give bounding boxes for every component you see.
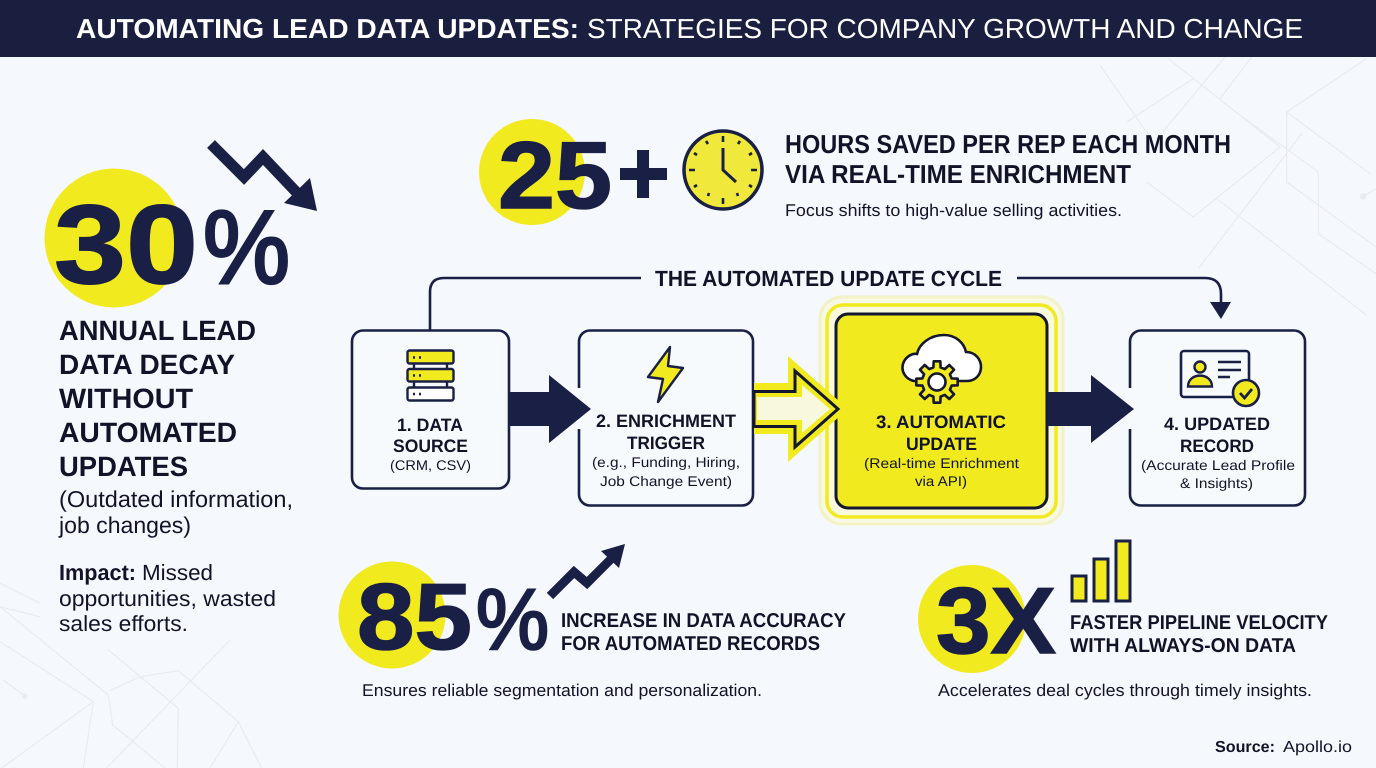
stat: 85% with highlight circle: % (476, 572, 549, 668)
stat: 3X with highlight circle: 3X (936, 568, 1056, 673)
text: step 4 label: (Accurate Lead Profile (1141, 457, 1295, 473)
text: step 4 label: RECORD (1180, 436, 1254, 456)
stat: 30% with highlight circle: % (203, 190, 290, 306)
text: impact: Impact: (59, 560, 136, 585)
arrow: step 3 to step 4 (1047, 375, 1134, 443)
text: pipeline velocity (938, 612, 1329, 700)
stat: 30% with highlight circle: 30 (54, 182, 198, 307)
text: step 4 label: 4. UPDATED (1164, 414, 1270, 434)
heading: the automated update cycle: THE AUTOMATED UPDATE CYCLE (655, 266, 1002, 291)
text: data accuracy: FOR AUTOMATED RECORDS (561, 633, 820, 655)
text: step 2 label: TRIGGER (627, 433, 705, 453)
source note (1215, 739, 1352, 756)
heading: annual lead data decay: WITHOUT (59, 383, 193, 414)
text: step 1 label: SOURCE (393, 436, 468, 456)
text: step 2 label (592, 411, 740, 489)
text: outdated information: job changes) (58, 512, 191, 538)
text: step 2 label: (e.g., Funding, Hiring, (592, 454, 740, 470)
heading: annual lead data decay: AUTOMATED (59, 417, 237, 448)
text: data accuracy: Ensures reliable segmentation and personalization. (362, 681, 762, 700)
text: step 1 label: 1. DATA (397, 415, 463, 435)
icon: cloud with gear (902, 335, 981, 403)
icon: lightning bolt (648, 347, 683, 402)
panel: step 1 data source (352, 330, 509, 488)
source note: Source: (1215, 739, 1275, 756)
arrow: step 2 to step 3 highlighted (754, 356, 848, 462)
icon: server stack (408, 350, 454, 400)
text: step 2 label: Job Change Event) (600, 473, 732, 489)
stat: 85% with highlight circle: 85 (357, 564, 472, 669)
text: impact (59, 560, 276, 636)
text: impact: opportunities, wasted (59, 586, 276, 611)
text: hours saved (785, 129, 1231, 220)
panel: 3X pipeline velocity (918, 541, 1329, 700)
heading: annual lead data decay (59, 315, 256, 482)
title banner: STRATEGIES FOR COMPANY GROWTH AND CHANGE (587, 13, 1303, 44)
arrow: step 1 to step 2 (509, 375, 591, 443)
arrow: cycle connector left (430, 278, 641, 330)
arrow: cycle connector right (1017, 278, 1231, 319)
text: data accuracy: INCREASE IN DATA ACCURACY (561, 610, 847, 632)
text: step 3 label: via API) (915, 473, 967, 489)
text: hours saved: Focus shifts to high-value selling activities. (785, 201, 1122, 220)
source note: Apollo.io (1283, 739, 1352, 756)
text: data accuracy (362, 610, 847, 700)
text: step 4 label: & Insights) (1180, 475, 1253, 491)
panel: step 2 enrichment trigger (579, 330, 753, 506)
stat: 25+ with highlight circle (479, 119, 667, 229)
text: step 1 label: (CRM, CSV) (390, 457, 471, 473)
text: pipeline velocity: FASTER PIPELINE VELOCITY (1070, 612, 1329, 634)
heading: annual lead data decay: UPDATES (59, 451, 188, 482)
text: hours saved: VIA REAL-TIME ENRICHMENT (785, 159, 1131, 189)
heading: annual lead data decay: DATA DECAY (59, 349, 235, 380)
panel: 25+ hours saved (479, 119, 1231, 229)
icon: bar chart (1072, 541, 1130, 601)
icon: upward trend arrow (550, 544, 625, 596)
panel: 85% data accuracy (338, 544, 847, 700)
text: pipeline velocity: Accelerates deal cycles through timely insights. (938, 681, 1312, 700)
stat: 30% with highlight circle (44, 168, 290, 308)
panel: step 4 updated record (1130, 330, 1305, 506)
text: step 2 label: 2. ENRICHMENT (596, 411, 736, 431)
text: step 4 label (1141, 414, 1295, 491)
stat: 85% with highlight circle (338, 562, 549, 669)
text: impact: Missed (142, 560, 213, 585)
stat: 25+ with highlight circle: 25 (498, 123, 612, 229)
text: step 3 label: UPDATE (906, 434, 977, 454)
heading: annual lead data decay: ANNUAL LEAD (59, 315, 256, 346)
text: outdated information: (Outdated information, (59, 486, 293, 512)
text: step 3 label: (Real-time Enrichment (864, 455, 1019, 471)
text: step 3 label: 3. AUTOMATIC (876, 412, 1006, 432)
panel: 30% data decay (44, 144, 317, 636)
text: outdated information (58, 486, 293, 538)
text: step 1 label (390, 415, 471, 473)
text: impact: sales efforts. (59, 611, 188, 636)
icon: profile card with check (1181, 351, 1259, 406)
title banner: AUTOMATING LEAD DATA UPDATES: (76, 13, 579, 44)
title banner (0, 0, 1376, 57)
text: hours saved: HOURS SAVED PER REP EACH MONTH (785, 129, 1231, 159)
text: pipeline velocity: WITH ALWAYS-ON DATA (1070, 635, 1296, 657)
panel: step 3 automatic update (820, 297, 1063, 524)
icon: clock (684, 131, 762, 209)
icon: downward trend arrow (211, 144, 317, 211)
text: step 3 label (864, 412, 1019, 489)
